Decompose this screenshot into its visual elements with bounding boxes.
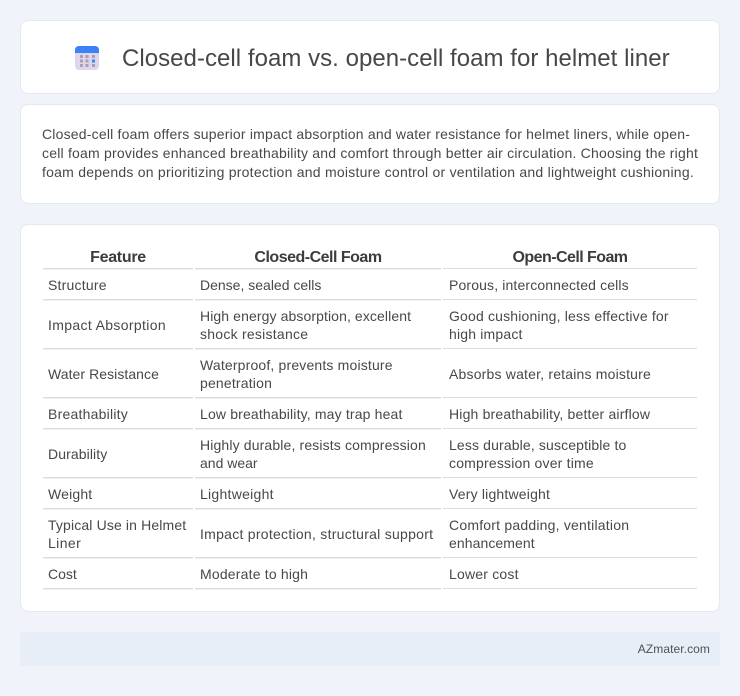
- row: Durability: Durability: [48, 446, 107, 462]
- row: Impact Absorption: Impact Absorption: [48, 317, 166, 333]
- row: Weight: Very lightweight: [449, 486, 550, 502]
- table header row: Open-Cell Foam: [512, 249, 627, 266]
- row: Water Resistance: Absorbs water, retains moisture: [449, 366, 651, 382]
- row: Breathability: [43, 406, 697, 430]
- row: Breathability: Breathability: [48, 406, 128, 422]
- row: Water Resistance: [43, 357, 697, 399]
- title: Closed-cell foam vs. open-cell foam for helmet liner: [122, 45, 670, 72]
- footer source text: AZmater.com: [638, 642, 710, 656]
- row: Structure: Dense, sealed cells: [200, 277, 321, 293]
- comparison table: [43, 249, 697, 590]
- row: Breathability: Low breathability, may trap heat: [200, 406, 403, 422]
- row: Typical Use in Helmet Liner: Impact protection, structural support: [200, 526, 433, 542]
- row: Impact Absorption: [43, 308, 697, 350]
- panel: summary card: [20, 104, 720, 204]
- icon: calendar: [75, 46, 99, 70]
- summary text: [42, 126, 698, 180]
- row: Structure: Porous, interconnected cells: [449, 277, 629, 293]
- row: Impact Absorption: shock resistance: [200, 326, 308, 342]
- row: Structure: [43, 277, 697, 301]
- summary text: cell foam provides enhanced breathability and comfort through better air circulation. Choosing the right: [42, 145, 698, 161]
- row: Typical Use in Helmet Liner: Typical Use in Helmet: [48, 517, 186, 533]
- row: Typical Use in Helmet Liner: [43, 517, 697, 559]
- row: Impact Absorption: Good cushioning, less effective for: [449, 308, 669, 324]
- footer bar: [20, 632, 720, 666]
- panel: title card: [20, 20, 720, 94]
- table header row: [43, 249, 697, 270]
- row: Cost: Lower cost: [449, 566, 519, 582]
- row: Structure: Structure: [48, 277, 107, 293]
- panel: comparison table card: [20, 224, 720, 612]
- summary text: foam depends on prioritizing protection and moisture control or ventilation and lightweight cushioning.: [42, 164, 694, 180]
- row: Cost: Moderate to high: [200, 566, 308, 582]
- row: Weight: Lightweight: [200, 486, 274, 502]
- row: Cost: Cost: [48, 566, 77, 582]
- row: Weight: [43, 486, 697, 510]
- row: Durability: Highly durable, resists compression: [200, 437, 426, 453]
- row: Weight: Weight: [48, 486, 92, 502]
- row: Water Resistance: Waterproof, prevents moisture: [200, 357, 393, 373]
- row: Durability: [43, 437, 697, 479]
- row: Durability: compression over time: [449, 455, 594, 471]
- summary text: Closed-cell foam offers superior impact absorption and water resistance for helmet liners, while open-: [42, 126, 690, 142]
- row: Durability: and wear: [200, 455, 258, 471]
- row: Durability: Less durable, susceptible to: [449, 437, 626, 453]
- row: Typical Use in Helmet Liner: enhancement: [449, 535, 535, 551]
- row: Typical Use in Helmet Liner: Liner: [48, 535, 81, 551]
- row: Water Resistance: penetration: [200, 375, 272, 391]
- row: Cost: [43, 566, 697, 590]
- row: Water Resistance: Water Resistance: [48, 366, 159, 382]
- table header row: Closed-Cell Foam: [254, 249, 382, 266]
- row: Typical Use in Helmet Liner: Comfort padding, ventilation: [449, 517, 629, 533]
- table header row: Feature: [90, 249, 146, 266]
- row: Impact Absorption: High energy absorption, excellent: [200, 308, 411, 324]
- row: Impact Absorption: high impact: [449, 326, 523, 342]
- row: Breathability: High breathability, better airflow: [449, 406, 650, 422]
